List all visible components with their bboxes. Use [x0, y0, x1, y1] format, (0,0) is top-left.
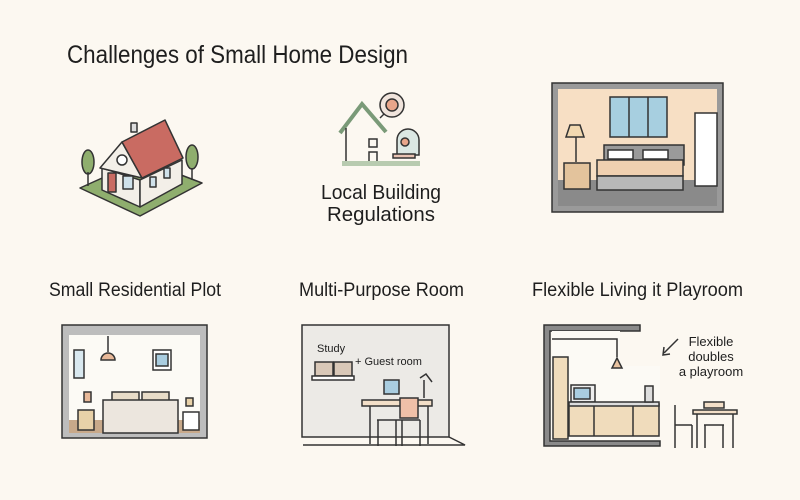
- callout: Flexible doubles a playroom: Flexible: [689, 334, 733, 349]
- text: Study: Study: [317, 343, 346, 355]
- text: + Guest room: + Guest room: [355, 356, 422, 368]
- callout: Flexible doubles a playroom: doubles: [688, 349, 734, 364]
- label: Flexible Living it Playroom: Flexible Living it Playroom: [532, 280, 743, 301]
- panel: bedroom top right: [552, 83, 723, 212]
- panel: small bedroom: [62, 325, 207, 438]
- icon: small house on plot: [80, 120, 202, 216]
- panel: multi-purpose room: [302, 325, 465, 446]
- panel: flexible living kitchen: [544, 325, 737, 448]
- label: Small Residential Plot: Small Residential Plot: [49, 280, 222, 301]
- label: Multi-Purpose Room: Multi-Purpose Room: [299, 280, 464, 301]
- callout: Flexible doubles a playroom: a playroom: [679, 364, 743, 379]
- text: Local Building Regulations: Local Building: [321, 182, 441, 204]
- arrow: flexible callout: [663, 339, 678, 355]
- callout: Flexible doubles a playroom: [679, 334, 743, 379]
- text: Regulations: [327, 204, 435, 226]
- icon: building regulations: [340, 93, 420, 166]
- title: Challenges of Small Home Design: [67, 41, 408, 69]
